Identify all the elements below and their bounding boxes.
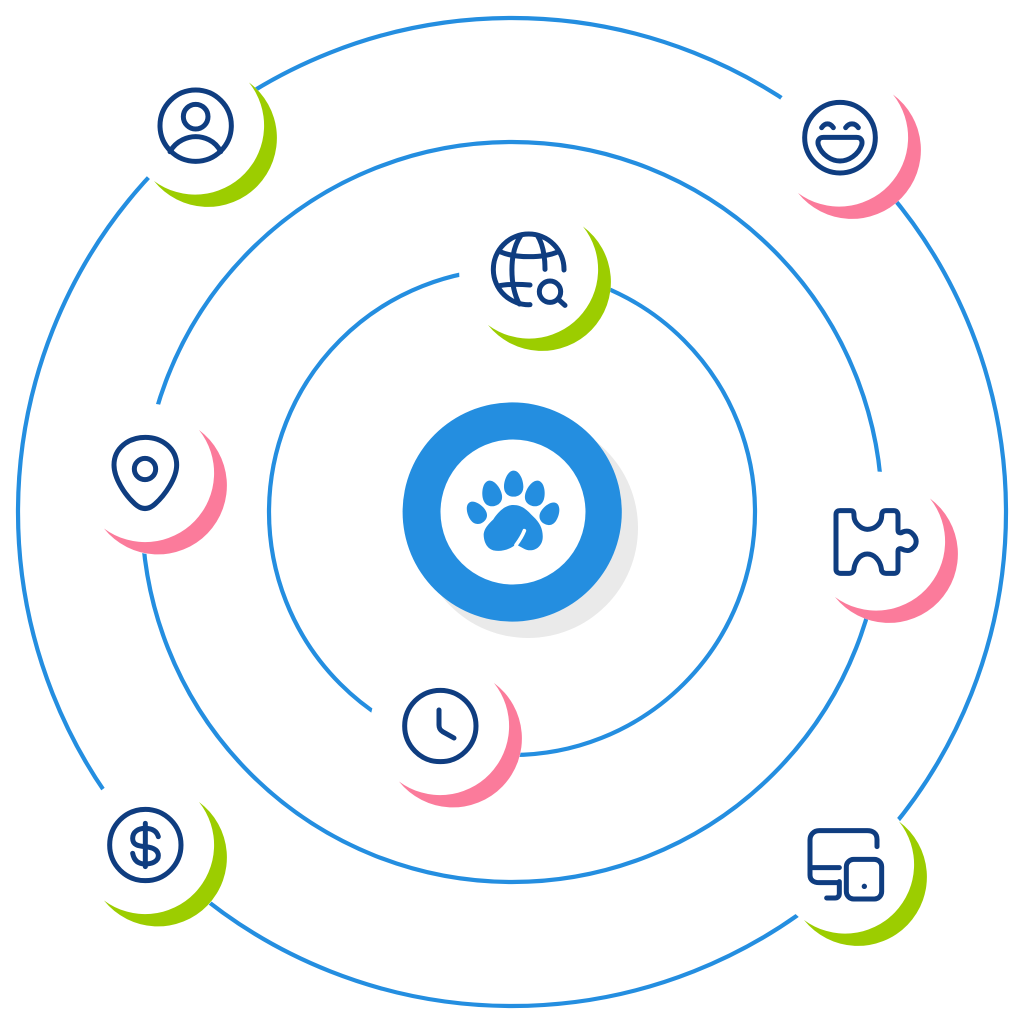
icon: puzzle piece	[836, 511, 916, 573]
icon: laughing face	[805, 102, 875, 173]
icon: globe search	[493, 234, 565, 305]
badge: map pin	[75, 403, 227, 555]
icon: paw	[462, 471, 564, 551]
central hub	[403, 402, 638, 638]
badge: devices	[775, 794, 927, 946]
icon: clock	[405, 690, 476, 762]
badge: person	[125, 56, 277, 207]
icon: map pin	[114, 437, 177, 508]
badge: laughing face	[769, 68, 921, 219]
inner orbit ring	[269, 269, 755, 755]
hub ring	[403, 402, 622, 622]
badge: dollar	[75, 775, 227, 927]
hub inner disc	[440, 440, 586, 584]
hub shadow	[418, 418, 638, 638]
badge: globe search	[459, 200, 611, 351]
icon: devices	[810, 831, 882, 899]
badge: clock	[370, 656, 522, 808]
icon: person	[160, 90, 231, 161]
icon: dollar	[110, 809, 181, 881]
badge: puzzle piece	[806, 472, 958, 623]
middle orbit ring	[142, 142, 882, 882]
